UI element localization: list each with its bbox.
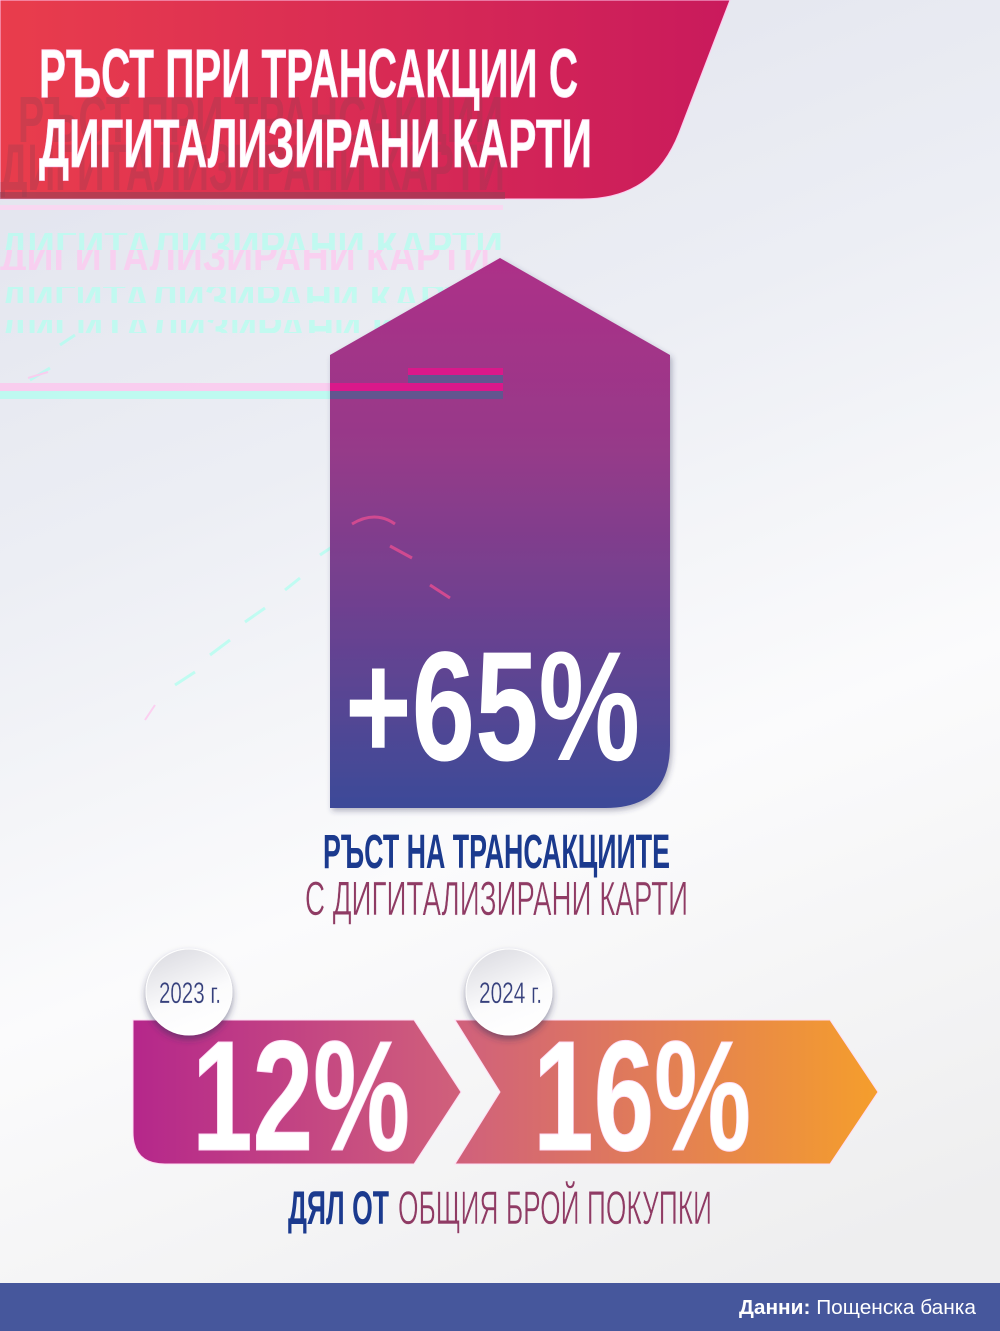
title: РЪСТ ПРИ ТРАНСАКЦИИ С <box>39 35 578 112</box>
title: ДИГИТАЛИЗИРАНИ КАРТИ <box>39 105 592 182</box>
footer bar <box>0 1283 1000 1331</box>
caption: share of purchases: ОБЩИЯ БРОЙ ПОКУПКИ <box>398 1181 712 1234</box>
arrow: 2024 share <box>455 1009 878 1184</box>
growth figure: +65% <box>345 620 640 794</box>
badge: 2023 <box>146 949 232 1035</box>
arrow: 2023 share <box>133 1009 461 1184</box>
text: ДИГИТАЛИЗИРАНИ КАРТИ <box>0 273 495 325</box>
header banner: РЪСТ ПРИ ТРАНСАКЦИИ <box>18 82 503 156</box>
header banner: ДИГИТАЛИЗИРАНИ КАРТИ <box>0 130 505 204</box>
panel: growth tag <box>330 258 670 808</box>
caption: transaction growth <box>305 826 688 926</box>
text: ДИГИТАЛИЗИРАНИ КАРТИ <box>0 303 498 355</box>
value 12%: 12% <box>192 1009 410 1184</box>
text: ДИГИТАЛИЗИРАНИ КАРТИ <box>0 230 490 282</box>
header banner <box>0 0 730 204</box>
caption: transaction growth: РЪСТ НА ТРАНСАКЦИИТЕ <box>323 826 670 879</box>
caption: share of purchases: ДЯЛ ОТ <box>288 1181 389 1234</box>
caption: share of purchases <box>288 1181 712 1234</box>
source credit: Данни: Пощенска банка <box>739 1297 977 1319</box>
badge: 2024: 2024 г. <box>479 977 542 1010</box>
text: ДИГИТАЛИЗИРАНИ КАРТИ <box>0 220 503 272</box>
banner shape <box>0 0 730 199</box>
tag shape <box>330 258 670 808</box>
badge: 2024 <box>466 949 552 1035</box>
value 16%: 16% <box>533 1009 751 1184</box>
caption: transaction growth: С ДИГИТАЛИЗИРАНИ КАРТИ <box>305 873 688 926</box>
badge: 2023: 2023 г. <box>159 977 221 1010</box>
title <box>39 35 592 182</box>
